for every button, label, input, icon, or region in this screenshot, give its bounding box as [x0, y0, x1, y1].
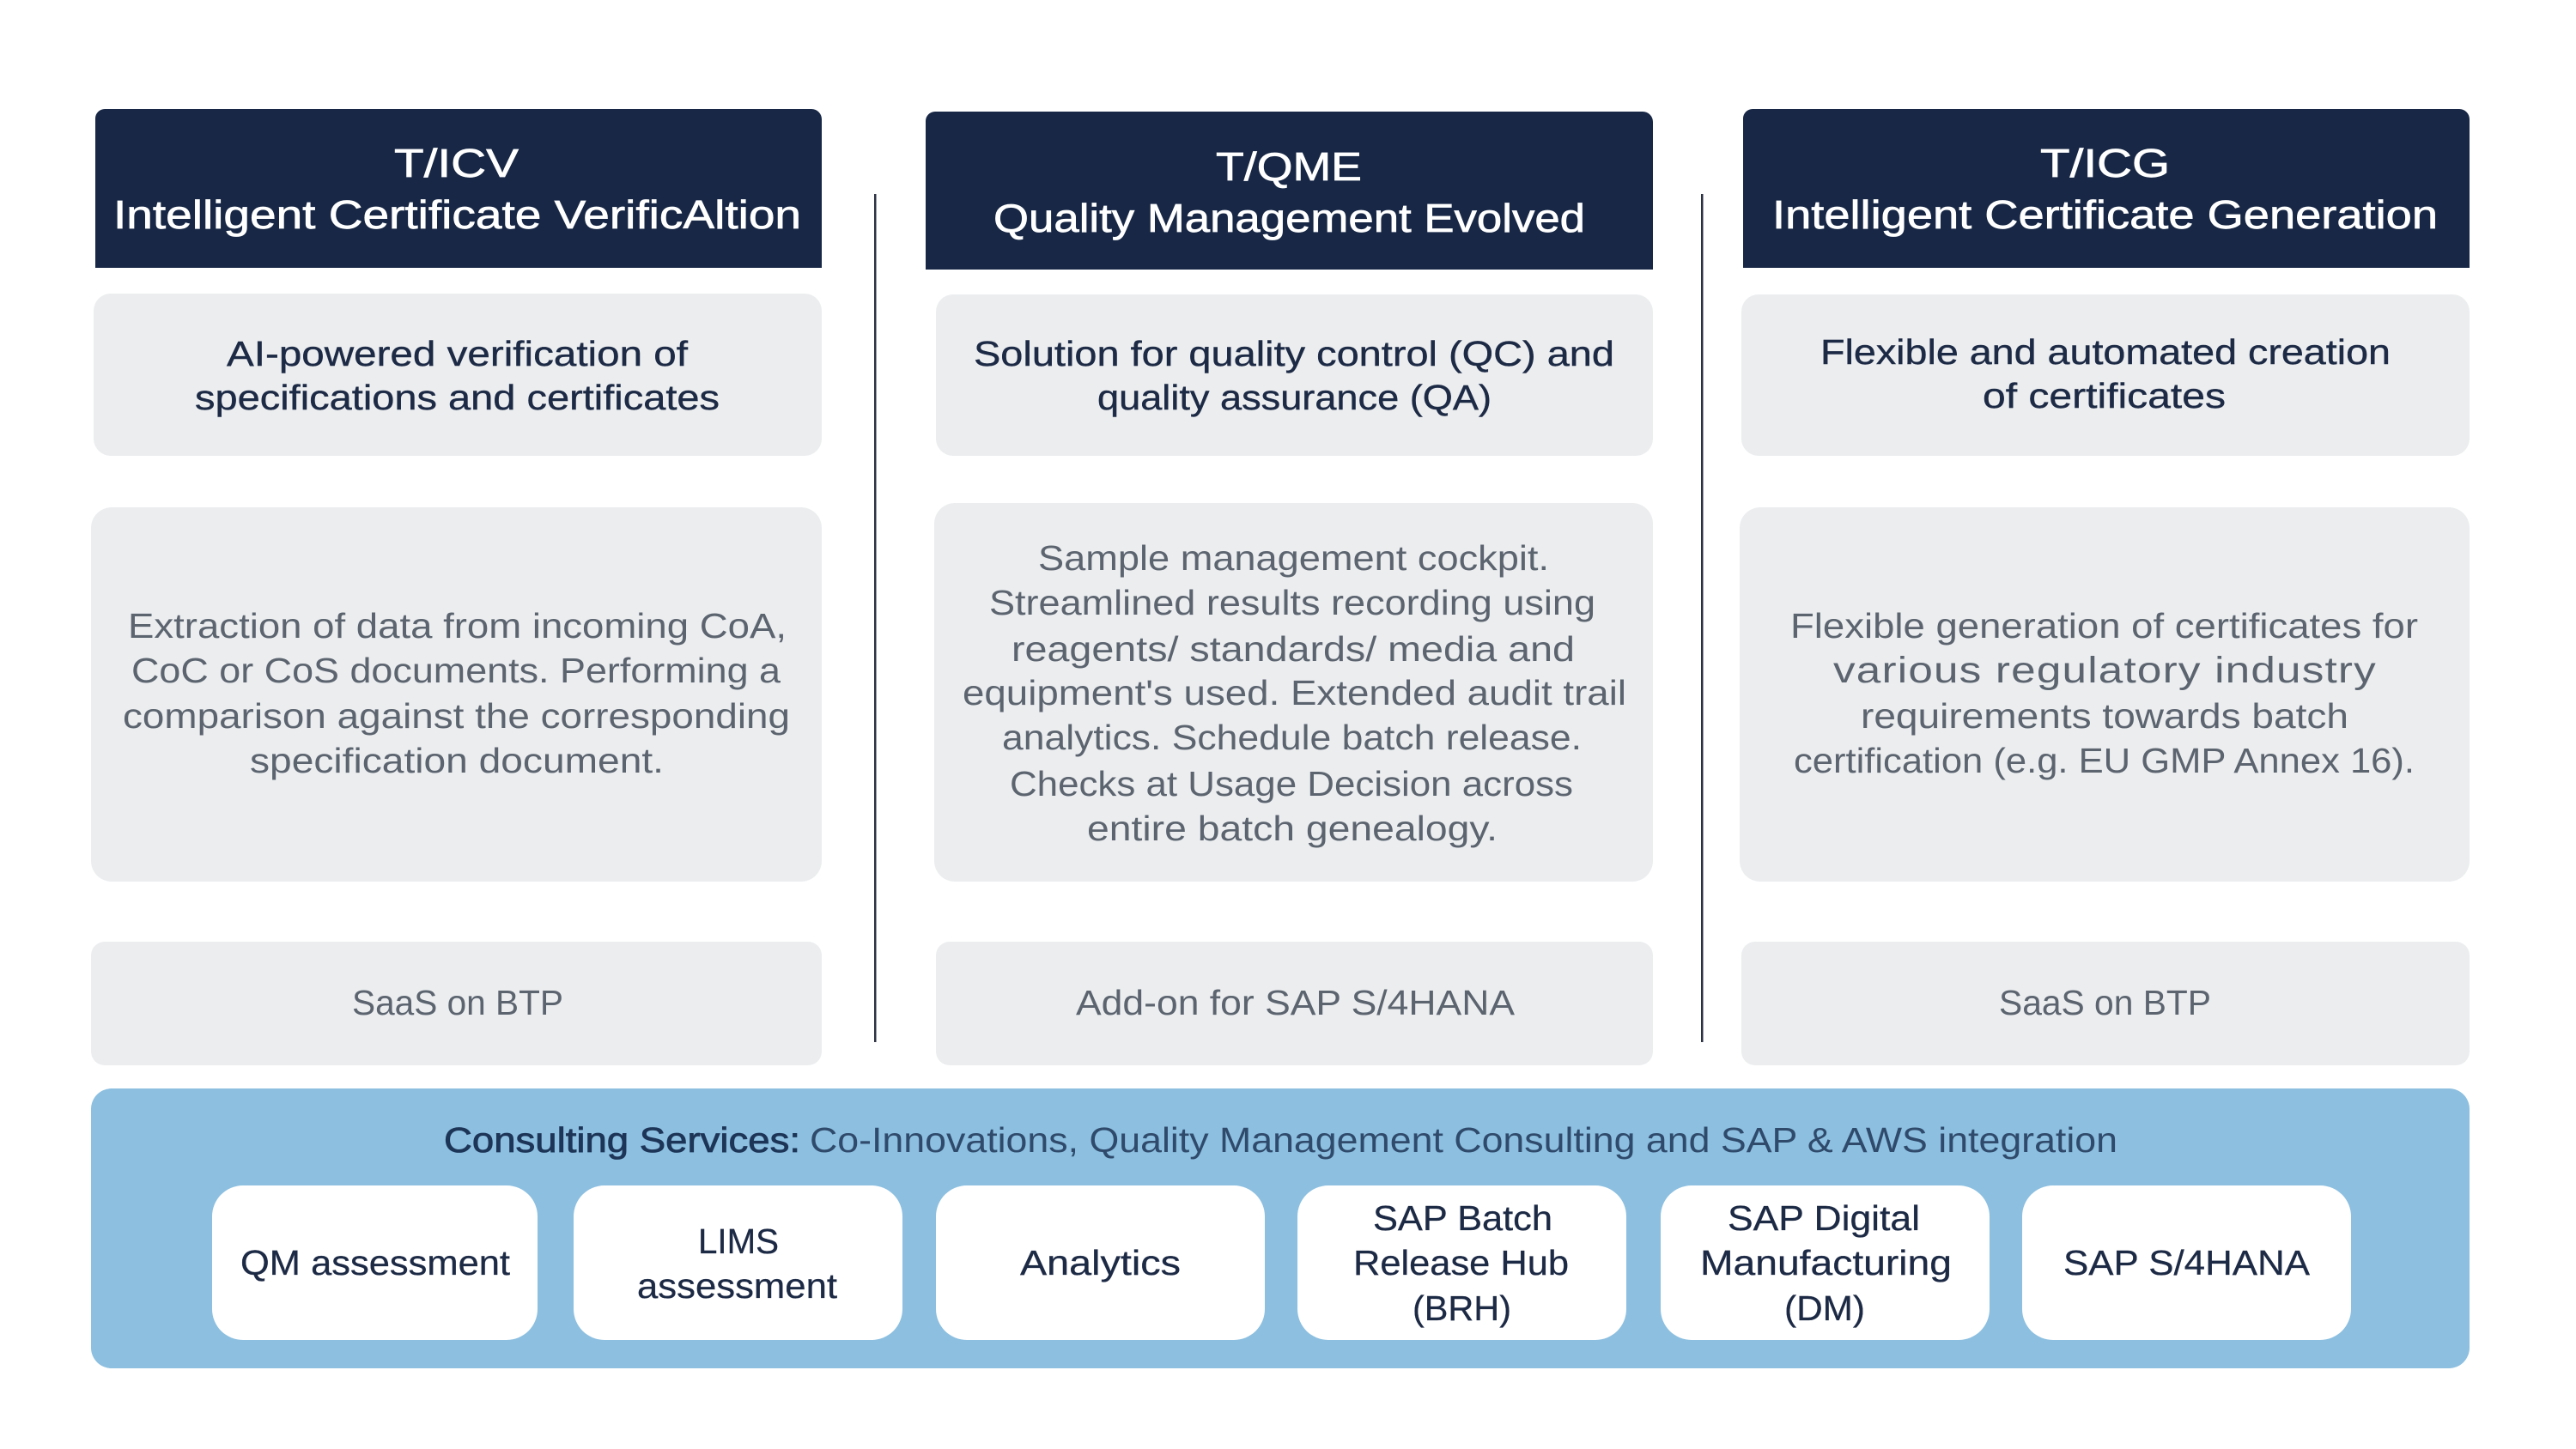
description: T/QME: Checks at Usage Decision across — [1010, 764, 1573, 803]
service card: SAP Batch Release Hub: Release Hub — [1353, 1243, 1569, 1282]
consulting services heading: Consulting Services: — [444, 1120, 800, 1160]
summary: T/ICG: Flexible and automated creation — [1820, 332, 2391, 372]
header: T/ICG — [1743, 109, 2470, 268]
service card: QM assessment: QM assessment — [240, 1243, 511, 1282]
panel: T/ICV column — [91, 109, 822, 1065]
panel: consulting services — [91, 1088, 2470, 1368]
description: T/QME: Sample management cockpit. — [1038, 538, 1549, 578]
description: T/QME: equipment's used. Extended audit trail — [963, 673, 1626, 712]
description: T/ICG: requirements towards batch — [1861, 696, 2348, 736]
description: T/ICV: specification document. — [250, 741, 664, 780]
service card: LIMS assessment: LIMS — [698, 1222, 779, 1261]
summary: T/ICV: AI-powered verification of — [227, 334, 689, 373]
header: T/ICG: T/ICG — [2040, 141, 2170, 185]
description: T/ICV: CoC or CoS documents. Performing a — [131, 651, 781, 690]
header: T/ICV — [95, 109, 822, 268]
deployment: T/QME: Add-on for SAP S/4HANA — [1076, 983, 1516, 1022]
service card: LIMS assessment: assessment — [637, 1266, 838, 1306]
summary: T/ICV: specifications and certificates — [195, 378, 720, 417]
service card: SAP Digital Manufacturing: (DM) — [1784, 1288, 1865, 1328]
description: T/ICG: certification (e.g. EU GMP Annex 16). — [1794, 741, 2415, 780]
header: T/ICV: T/ICV — [394, 141, 519, 185]
service card: QM assessment — [212, 1185, 538, 1340]
description: T/ICV: comparison against the corresponding — [123, 696, 790, 736]
summary: T/ICG: of certificates — [1983, 376, 2226, 415]
summary: T/ICG — [1741, 294, 2470, 456]
deployment: T/ICG — [1741, 942, 2470, 1065]
summary: T/QME: Solution for quality control (QC) and — [974, 334, 1614, 373]
description: T/QME: analytics. Schedule batch release. — [1002, 718, 1582, 757]
panel: T/QME column — [926, 112, 1653, 1065]
description: T/ICV — [91, 507, 822, 882]
divider: left — [874, 194, 876, 1042]
service card: SAP Digital Manufacturing: Manufacturing — [1700, 1243, 1952, 1282]
description: T/ICG — [1740, 507, 2470, 882]
description: T/ICG: Flexible generation of certificates for — [1790, 606, 2418, 646]
service card: SAP Digital Manufacturing: SAP Digital — [1728, 1198, 1920, 1238]
header: T/QME — [926, 112, 1653, 270]
header: T/ICV: Intelligent Certificate VerificAltion — [113, 192, 801, 237]
description: T/QME — [934, 503, 1653, 882]
service card: Analytics: Analytics — [1020, 1243, 1181, 1282]
service card: SAP Batch Release Hub: (BRH) — [1413, 1288, 1511, 1328]
summary: T/ICV — [94, 294, 822, 456]
service card: SAP S/4HANA — [2022, 1185, 2351, 1340]
service card: LIMS assessment — [574, 1185, 902, 1340]
header: T/ICG: Intelligent Certificate Generation — [1772, 192, 2438, 237]
deployment: T/ICV — [91, 942, 822, 1065]
service card: SAP S/4HANA: SAP S/4HANA — [2063, 1243, 2311, 1282]
summary: T/QME: quality assurance (QA) — [1097, 378, 1492, 417]
deployment: T/QME — [936, 942, 1653, 1065]
deployment: T/ICG: SaaS on BTP — [1999, 983, 2211, 1022]
description: T/QME: entire batch genealogy. — [1087, 809, 1498, 848]
service card: SAP Digital Manufacturing — [1661, 1185, 1990, 1340]
consulting services heading: Co-Innovations, Quality Management Consulting and SAP & AWS integration — [810, 1120, 2117, 1160]
description: T/ICG: various regulatory industry — [1833, 650, 2377, 691]
description: T/QME: Streamlined results recording using — [989, 583, 1595, 622]
divider: right — [1701, 194, 1704, 1042]
service card: SAP Batch Release Hub: SAP Batch — [1373, 1198, 1552, 1238]
panel: T/ICG column — [1740, 109, 2470, 1065]
summary: T/QME — [936, 294, 1653, 456]
service card: SAP Batch Release Hub — [1297, 1185, 1626, 1340]
header: T/QME: T/QME — [1216, 144, 1362, 189]
description: T/ICV: Extraction of data from incoming CoA, — [128, 606, 787, 646]
deployment: T/ICV: SaaS on BTP — [352, 983, 563, 1022]
description: T/QME: reagents/ standards/ media and — [1012, 629, 1575, 669]
header: T/QME: Quality Management Evolved — [993, 196, 1585, 240]
service card: Analytics — [936, 1185, 1265, 1340]
